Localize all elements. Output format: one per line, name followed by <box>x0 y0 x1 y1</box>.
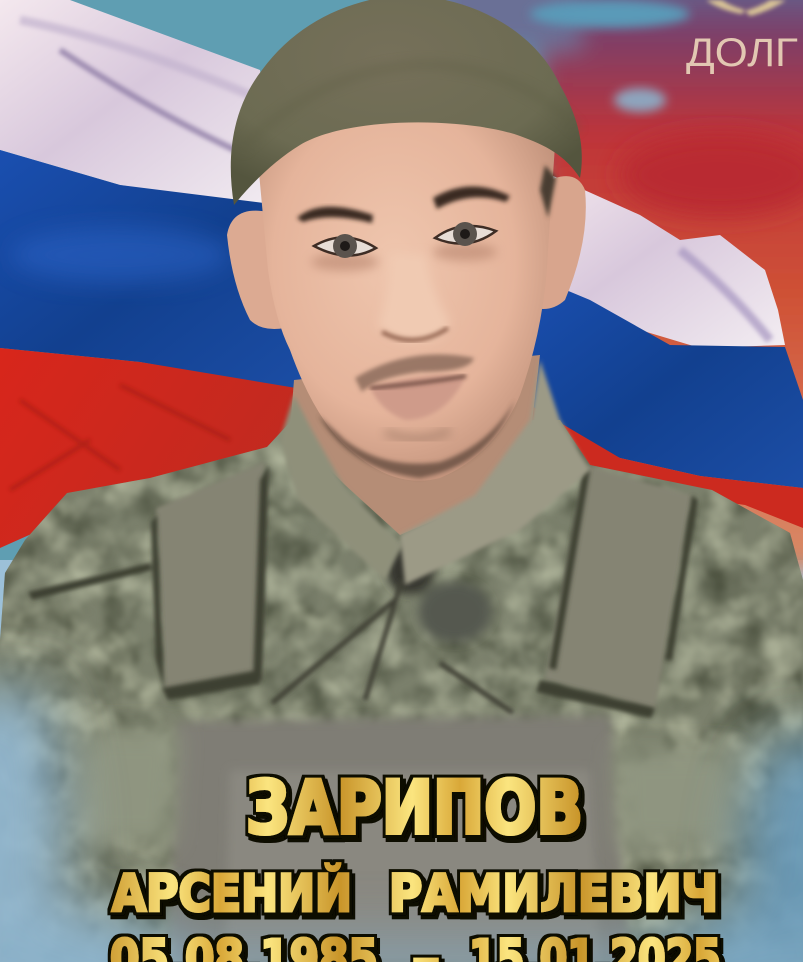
left vest strap <box>156 462 265 692</box>
eyes <box>314 222 496 258</box>
logo: ДОЛГ <box>686 31 798 75</box>
collar left <box>280 395 402 580</box>
temple hair <box>540 165 556 218</box>
brows <box>297 207 373 223</box>
hat <box>231 0 582 205</box>
name and dates <box>110 766 721 962</box>
chest plate <box>170 716 630 962</box>
ear right <box>535 176 586 309</box>
collar right <box>400 360 590 585</box>
beard <box>318 400 515 478</box>
flag: right section <box>530 170 803 528</box>
logo <box>686 0 798 75</box>
name and dates: РАМИЛЕВИЧ <box>389 865 718 924</box>
flag: left section <box>0 0 320 548</box>
under-eye shading <box>311 243 497 271</box>
ear left <box>227 211 285 329</box>
neck <box>290 355 540 535</box>
moustache and mouth <box>355 354 474 392</box>
front seams <box>272 580 513 713</box>
nose <box>378 255 450 341</box>
camouflage texture <box>0 434 803 940</box>
clouds at the bottom <box>0 690 803 962</box>
name and dates: ЗАРИПОВ <box>246 766 583 851</box>
laurel icon <box>706 0 786 16</box>
right vest strap <box>545 465 692 710</box>
face <box>256 102 556 481</box>
side pouches <box>75 730 180 845</box>
name and dates: АРСЕНИЙ <box>112 863 352 924</box>
central dark blotches <box>386 546 491 642</box>
jacket <box>0 400 803 962</box>
